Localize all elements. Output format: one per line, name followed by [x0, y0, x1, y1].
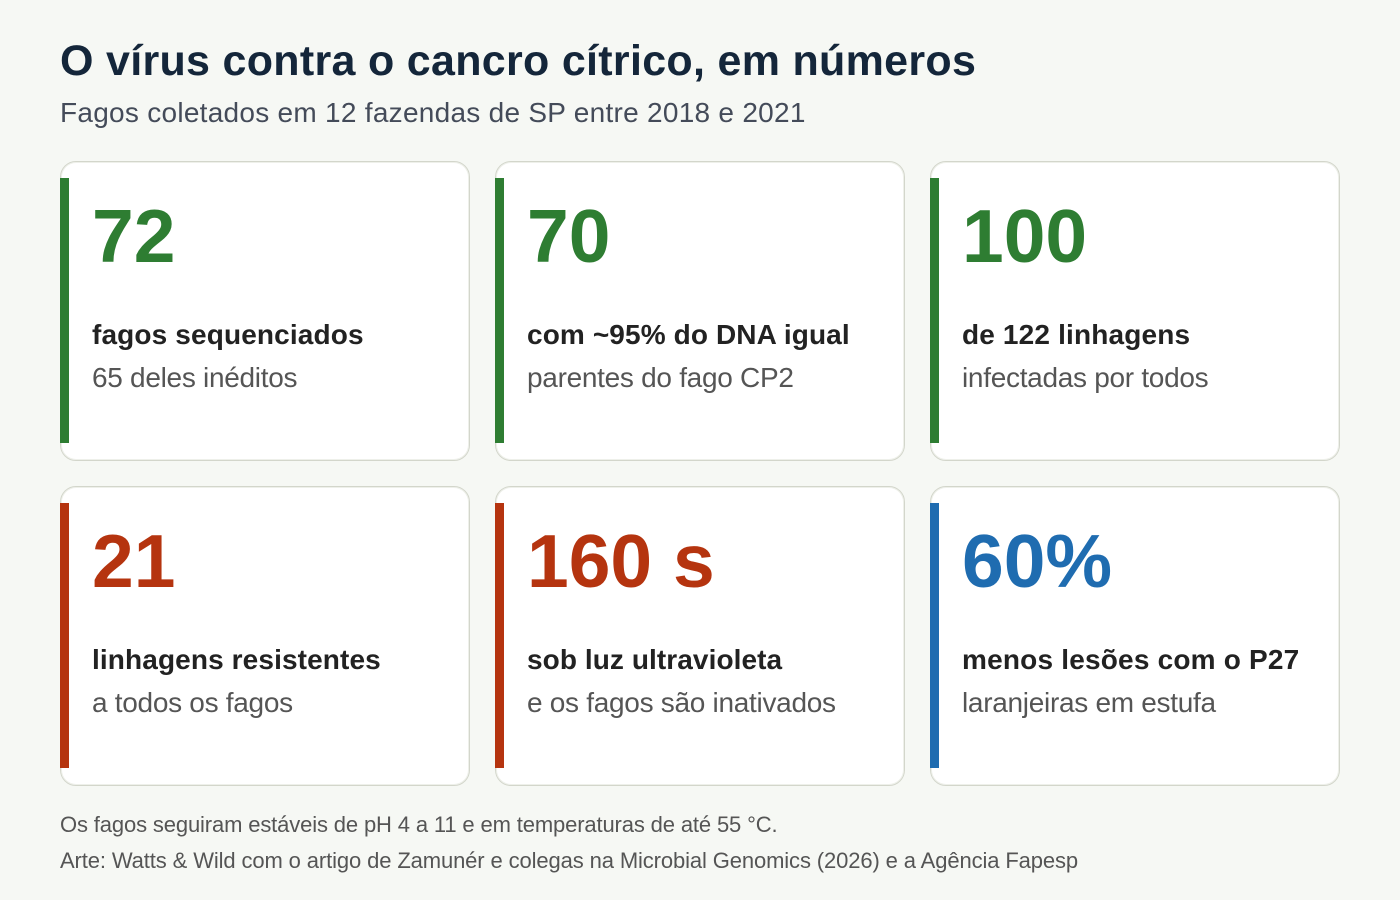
panel: 160 s sob luz ultravioleta: sob luz ultravioleta [527, 644, 782, 674]
panel: 160 s sob luz ultravioleta: e os fagos são inativados [527, 686, 836, 718]
panel: 21 linhagens resistentes: linhagens resistentes [92, 644, 381, 674]
panel: 21 linhagens resistentes [60, 486, 470, 786]
panel: 60% menos lesões: laranjeiras em estufa [962, 686, 1216, 718]
panel: 72 fagos sequenciados: 72 [92, 194, 175, 278]
panel: 100 de 122 linhagens: de 122 linhagens [962, 318, 1190, 350]
panel: 60% menos lesões [930, 486, 1340, 786]
panel: 72 fagos sequenciados: 65 deles inéditos [92, 362, 297, 392]
panel: 160 s sob luz ultravioleta: 160 s [527, 518, 715, 602]
title: O vírus contra o cancro cítrico, em números [60, 37, 976, 85]
source credit: Arte: Watts & Wild com o artigo de Zamunér e colegas na Microbial Genomics (2026) e a Agência Fapesp [60, 848, 1078, 873]
panel: 100 de 122 linhagens [930, 161, 1340, 461]
panel: 21 linhagens resistentes: 21 [92, 518, 175, 602]
subtitle: Fagos coletados em 12 fazendas de SP entre 2018 e 2021 [60, 96, 806, 128]
panel: 60% menos lesões: 60% [962, 518, 1112, 602]
panel: 72 fagos sequenciados [60, 161, 470, 461]
panel: 70 com DNA igual: com ~95% do DNA igual [527, 318, 850, 350]
panel: 70 com DNA igual: 70 [527, 194, 610, 278]
panel: 100 de 122 linhagens: 100 [962, 194, 1087, 278]
panel: 100 de 122 linhagens: infectadas por todos [962, 362, 1208, 392]
panel: 21 linhagens resistentes: a todos os fagos [92, 686, 293, 718]
panel: 160 s sob luz ultravioleta [495, 486, 905, 786]
panel: 70 com DNA igual: parentes do fago CP2 [527, 362, 794, 392]
panel: 72 fagos sequenciados: fagos sequenciados [92, 318, 364, 350]
panel: 70 com DNA igual [495, 161, 905, 461]
panel: 60% menos lesões: menos lesões com o P27 [962, 644, 1299, 674]
footnote: Os fagos seguiram estáveis de pH 4 a 11 e em temperaturas de até 55 °C. [60, 812, 778, 837]
